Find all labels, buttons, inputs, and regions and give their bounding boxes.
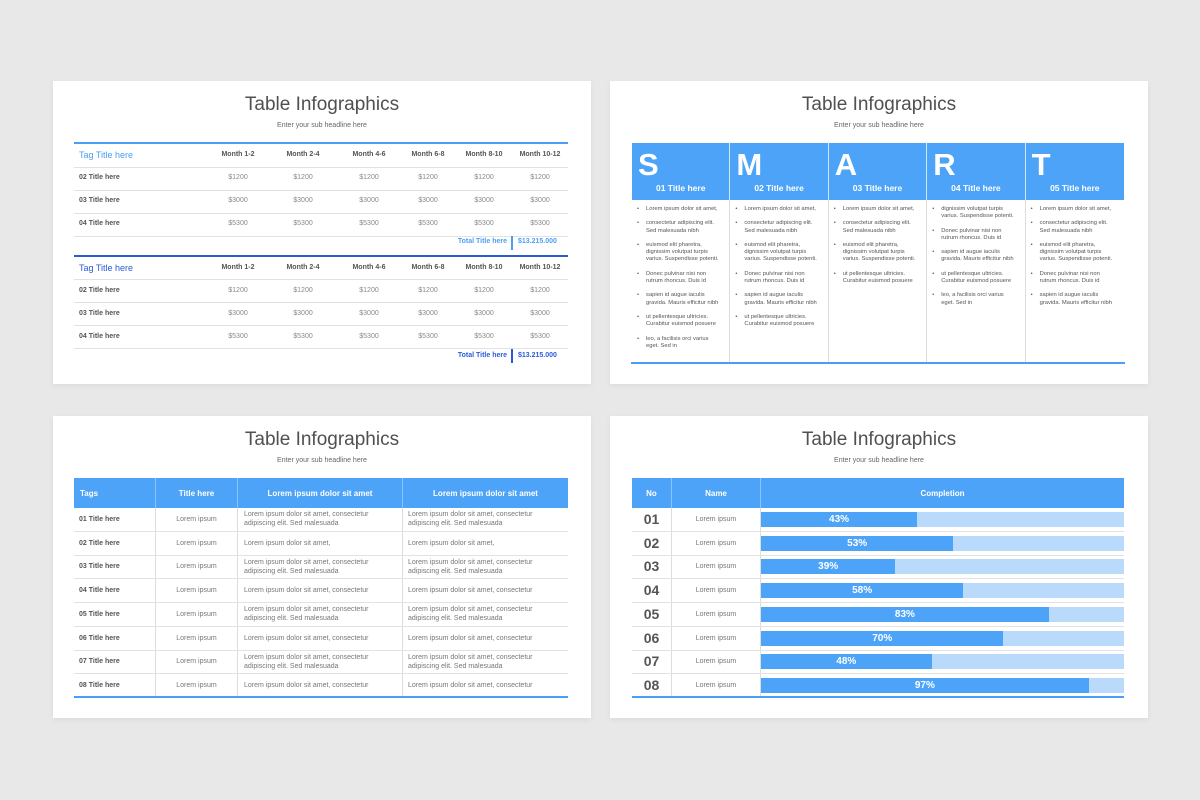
completion table: 53% (847, 538, 867, 549)
table 2: $1200 (474, 287, 494, 294)
column M: sapien id augue iaculis gravida. Mauris efficitur nibh (744, 292, 817, 306)
completion table: Lorem ipsum (696, 658, 736, 665)
table 1: Total Title here (458, 238, 507, 245)
completion table: 06 (644, 630, 659, 646)
completion table: Name (705, 488, 727, 498)
table: Lorem ipsum dolor sit amet, (244, 540, 330, 547)
column R (927, 143, 1026, 362)
table 2: $1200 (293, 287, 313, 294)
panel: completion bars (610, 416, 1148, 718)
table: Lorem ipsum dolor sit amet, consectetur (244, 587, 368, 594)
table 2: 02 Title here (79, 287, 120, 294)
table 2: Month 10-12 (520, 264, 560, 271)
table 1: $13.215.000 (518, 238, 557, 245)
table 1: $1200 (228, 174, 248, 181)
table: 06 Title here (79, 635, 120, 642)
table 1: $5300 (530, 220, 550, 227)
column T (1026, 143, 1124, 306)
column T: T (1032, 147, 1051, 182)
table (74, 478, 568, 698)
table 1: $1200 (530, 174, 550, 181)
table: Lorem ipsum (176, 540, 217, 547)
table: 07 Title here (79, 658, 120, 665)
table: Title here (179, 488, 214, 498)
table 1: $3000 (293, 197, 313, 204)
table 2: $5300 (474, 333, 494, 340)
table 2: $5300 (359, 333, 379, 340)
table: Lorem ipsum (176, 682, 217, 689)
table 2: $3000 (293, 310, 313, 317)
table 1: $1200 (293, 174, 313, 181)
completion table: 48% (836, 656, 856, 667)
table: Lorem ipsum dolor sit amet, consectetur adipiscing elit. Sed malesuada (244, 606, 368, 622)
table 1: $5300 (293, 220, 313, 227)
table 1: $5300 (474, 220, 494, 227)
table 2: $1200 (359, 287, 379, 294)
table 2: Tag Title here (79, 263, 133, 273)
completion table: 83% (895, 609, 915, 620)
completion table: Completion (920, 488, 964, 498)
table: Lorem ipsum dolor sit amet, consectetur adipiscing elit. Sed malesuada (408, 654, 532, 670)
table: Lorem ipsum (176, 516, 217, 523)
panel: tags table (53, 416, 591, 718)
table: 02 Title here (79, 540, 120, 547)
column A: consectetur adipiscing elit. Sed malesuada nibh (843, 220, 911, 234)
column R: sapien id augue iaculis gravida. Mauris efficitur nibh (941, 249, 1014, 262)
completion table (632, 478, 1124, 698)
table: Lorem ipsum dolor sit amet, consectetur (408, 682, 532, 689)
table: Lorem ipsum dolor sit amet, consectetur (244, 635, 368, 642)
table 2: $1200 (228, 287, 248, 294)
table 1: $3000 (359, 197, 379, 204)
completion table: Lorem ipsum (696, 540, 736, 547)
column M: Lorem ipsum dolor sit amet, (744, 206, 816, 212)
column S: Donec pulvinar nisi non rutrum rhoncus. Duis id (646, 271, 706, 284)
completion table: 08 (644, 677, 659, 693)
table 2: $5300 (418, 333, 438, 340)
table: Lorem ipsum (176, 587, 217, 594)
column A: euismod elit pharetra, dignissim volutpat turpis varius. Suspendisse potenti. (843, 242, 915, 262)
table: Lorem ipsum dolor sit amet, consectetur adipiscing elit. Sed malesuada (408, 606, 532, 622)
column S: consectetur adipiscing elit. Sed malesuada nibh (646, 220, 714, 234)
table 1: 03 Title here (79, 197, 120, 204)
column M: consectetur adipiscing elit. Sed malesuada nibh (744, 220, 812, 234)
table 1: $1200 (418, 174, 438, 181)
column S: ut pellentesque ultricies. Curabitur euismod posuere (646, 314, 716, 327)
column A: A (835, 147, 857, 182)
table: 05 Title here (79, 611, 120, 618)
column A: Lorem ipsum dolor sit amet, (843, 206, 914, 212)
title: Table Infographics (245, 429, 399, 450)
column M (730, 143, 829, 362)
table: Lorem ipsum dolor sit amet, consectetur (408, 635, 532, 642)
table 1: Month 6-8 (411, 151, 445, 158)
table: Lorem ipsum dolor sit amet, (408, 540, 494, 547)
completion table: 07 (644, 653, 659, 669)
table 1: $1200 (474, 174, 494, 181)
table 1: 04 Title here (79, 220, 120, 227)
table: 08 Title here (79, 682, 120, 689)
table 2 (74, 255, 568, 363)
table 1: $5300 (228, 220, 248, 227)
panel: SMART (610, 81, 1148, 384)
column S: leo, a facilisis orci varius eget. Sed in (646, 336, 708, 349)
completion table: 97% (915, 680, 935, 691)
completion table: 04 (644, 582, 659, 598)
table 1: Month 2-4 (286, 151, 320, 158)
completion table: Lorem ipsum (696, 611, 736, 618)
table 1: Month 8-10 (466, 151, 502, 158)
column M: Donec pulvinar nisi non rutrum rhoncus. Duis id (744, 271, 805, 284)
column M: euismod elit pharetra, dignissim volutpat turpis varius. Suspendisse potenti. (744, 242, 817, 262)
column R: ut pellentesque ultricies. Curabitur euismod posuere (941, 271, 1011, 284)
table: 03 Title here (79, 563, 120, 570)
table: Lorem ipsum dolor sit amet, consectetur adipiscing elit. Sed malesuada (408, 559, 532, 575)
column R: leo, a facilisis orci varius eget. Sed in (941, 292, 1004, 306)
column S: sapien id augue iaculis gravida. Mauris efficitur nibh (646, 292, 718, 306)
completion table: 01 (644, 511, 659, 527)
table 2: $5300 (530, 333, 550, 340)
column S (632, 143, 730, 362)
table 1 (74, 142, 568, 250)
column A (829, 143, 927, 362)
completion table: Lorem ipsum (696, 587, 736, 594)
subtitle: Enter your sub headline here (834, 122, 924, 129)
column R: dignissim volutpat turpis varius. Suspendisse potenti. (941, 206, 1014, 219)
completion table: Lorem ipsum (696, 516, 736, 523)
table 1: Tag Title here (79, 150, 133, 160)
table: Lorem ipsum (176, 658, 217, 665)
column T: euismod elit pharetra, dignissim volutpat turpis varius. Suspendisse potenti. (1040, 242, 1112, 262)
table: Lorem ipsum dolor sit amet (433, 488, 538, 498)
table 2: Total Title here (458, 352, 507, 359)
table: 01 Title here (79, 516, 120, 523)
completion table: 39% (818, 561, 838, 572)
table: Tags (80, 488, 98, 498)
table: Lorem ipsum dolor sit amet (268, 488, 372, 498)
table 1: $3000 (418, 197, 438, 204)
column S: euismod elit pharetra, dignissim volutpat turpis varius. Suspendisse potenti. (646, 242, 719, 262)
completion table: 43% (829, 514, 849, 525)
table 1: $3000 (228, 197, 248, 204)
table 1: $1200 (359, 174, 379, 181)
table 2: Month 2-4 (286, 264, 320, 271)
subtitle: Enter your sub headline here (277, 122, 367, 129)
table 1: Month 10-12 (520, 151, 560, 158)
column S: 01 Title here (656, 183, 705, 193)
completion table: 03 (644, 558, 659, 574)
table 1: $5300 (359, 220, 379, 227)
table 2: $5300 (228, 333, 248, 340)
completion table: 70% (872, 633, 892, 644)
column M: M (736, 147, 762, 182)
table 1: Month 1-2 (221, 151, 255, 158)
column T: sapien id augue iaculis gravida. Mauris efficitur nibh (1040, 292, 1112, 306)
table 2: Month 4-6 (352, 264, 386, 271)
table 1: $5300 (418, 220, 438, 227)
subtitle: Enter your sub headline here (277, 457, 367, 464)
table: Lorem ipsum dolor sit amet, consectetur adipiscing elit. Sed malesuada (244, 511, 368, 527)
completion table: Lorem ipsum (696, 682, 736, 689)
column M: 02 Title here (754, 183, 804, 193)
table 1: $3000 (474, 197, 494, 204)
column R: R (933, 147, 956, 182)
table: Lorem ipsum dolor sit amet, consectetur (244, 682, 368, 689)
table: Lorem ipsum (176, 563, 217, 570)
table: Lorem ipsum (176, 611, 217, 618)
completion table: Lorem ipsum (696, 635, 736, 642)
column S: Lorem ipsum dolor sit amet, (646, 206, 718, 212)
table 2: $3000 (530, 310, 550, 317)
table 2: Month 6-8 (411, 264, 445, 271)
table: 04 Title here (79, 587, 120, 594)
table 2: $1200 (418, 287, 438, 294)
column R: Donec pulvinar nisi non rutrum rhoncus. Duis id (941, 228, 1001, 241)
completion table: No (646, 488, 657, 498)
table: Lorem ipsum (176, 635, 217, 642)
table: Lorem ipsum dolor sit amet, consectetur adipiscing elit. Sed malesuada (244, 559, 368, 575)
table 1: $3000 (530, 197, 550, 204)
completion table: 05 (644, 606, 659, 622)
title: Table Infographics (802, 94, 956, 115)
completion table: Lorem ipsum (696, 563, 736, 570)
title: Table Infographics (245, 94, 399, 115)
column A: ut pellentesque ultricies. Curabitur euismod posuere (843, 271, 913, 284)
table: Lorem ipsum dolor sit amet, consectetur adipiscing elit. Sed malesuada (244, 654, 368, 670)
column A: 03 Title here (853, 183, 902, 193)
table 2: 03 Title here (79, 310, 120, 317)
table 2: Month 1-2 (221, 264, 255, 271)
title: Table Infographics (802, 429, 956, 450)
table: Lorem ipsum dolor sit amet, consectetur adipiscing elit. Sed malesuada (408, 511, 532, 527)
table 1: 02 Title here (79, 174, 120, 181)
column T: Lorem ipsum dolor sit amet, (1040, 206, 1111, 212)
table 2: $3000 (418, 310, 438, 317)
column T: consectetur adipiscing elit. Sed malesuada nibh (1040, 220, 1108, 234)
column M: ut pellentesque ultricies. Curabitur euismod posuere (744, 314, 814, 327)
table 2: $1200 (530, 287, 550, 294)
column T: Donec pulvinar nisi non rutrum rhoncus. Duis id (1040, 271, 1100, 284)
subtitle: Enter your sub headline here (834, 457, 924, 464)
table 2: 04 Title here (79, 333, 120, 340)
table 2: $13.215.000 (518, 352, 557, 359)
completion table: 58% (852, 585, 872, 596)
table 2: $3000 (228, 310, 248, 317)
panel: two-table totals (53, 81, 591, 384)
table 2: $5300 (293, 333, 313, 340)
table 2: $3000 (474, 310, 494, 317)
table 2: Month 8-10 (466, 264, 502, 271)
column S: S (638, 147, 659, 182)
column T: 05 Title here (1050, 183, 1100, 193)
column R: 04 Title here (951, 183, 1001, 193)
completion table: 02 (644, 535, 659, 551)
table 1: Month 4-6 (352, 151, 386, 158)
table: Lorem ipsum dolor sit amet, consectetur (408, 587, 532, 594)
table 2: $3000 (359, 310, 379, 317)
